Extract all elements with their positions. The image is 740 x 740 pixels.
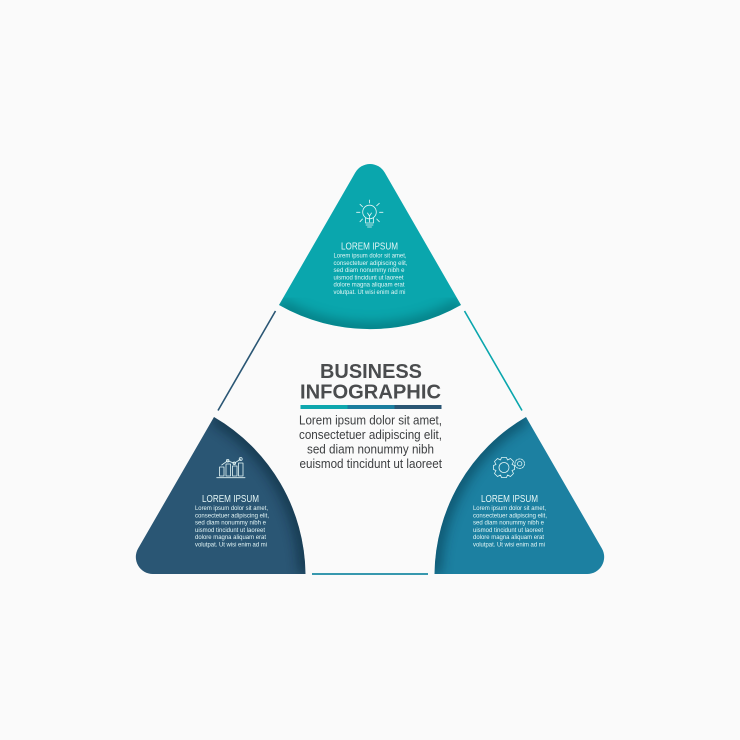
title underline bar: [300, 405, 442, 409]
text block: top panel: uismod tincidunt ut laoreet: [334, 274, 404, 281]
text block: right panel: dolore magna aliquam erat: [473, 534, 544, 541]
connector: left line: [218, 311, 276, 410]
title: INFOGRAPHIC: [300, 380, 441, 404]
text block: left panel: consectetuer adipiscing elit,: [195, 512, 269, 519]
connector: right line: [464, 311, 522, 410]
panel: right triangle: [434, 417, 604, 574]
text block: center description: sed diam nonummy nibh: [307, 442, 434, 456]
text block: right panel: consectetuer adipiscing elit,: [473, 512, 547, 519]
text block: top panel: Lorem ipsum dolor sit amet,: [334, 252, 407, 260]
text block: top panel: volutpat. Ut wisi enim ad mi: [334, 289, 406, 296]
text block: right panel: uismod tincidunt ut laoreet: [473, 527, 543, 534]
panel: top triangle: [279, 164, 461, 329]
text block: center description: euismod tincidunt ut laoreet: [300, 456, 442, 471]
text block: left panel: dolore magna aliquam erat: [195, 534, 266, 541]
text block: right panel: sed diam nonummy nibh e: [473, 520, 544, 526]
text block: top panel: sed diam nonummy nibh e: [334, 267, 405, 274]
text block: top panel: consectetuer adipiscing elit,: [334, 260, 408, 267]
connector: bottom line: [312, 573, 428, 575]
text block: left panel: volutpat. Ut wisi enim ad mi: [195, 541, 267, 548]
icon: gears: [494, 458, 524, 478]
text block: right panel: Lorem ipsum dolor sit amet,: [473, 505, 546, 512]
text block: right panel: volutpat. Ut wisi enim ad mi: [473, 541, 545, 548]
title: [300, 360, 441, 404]
text block: left panel: sed diam nonummy nibh e: [195, 520, 266, 526]
icon: bar chart: [217, 458, 245, 478]
heading: right panel: LOREM IPSUM: [481, 494, 538, 505]
text block: left panel: uismod tincidunt ut laoreet: [195, 527, 265, 534]
heading: left panel: LOREM IPSUM: [202, 494, 259, 505]
panel: left triangle: [136, 417, 306, 574]
text block: left panel: Lorem ipsum dolor sit amet,: [195, 505, 268, 512]
heading: top panel: LOREM IPSUM: [341, 242, 398, 252]
text block: center description: Lorem ipsum dolor sit amet,: [299, 412, 442, 428]
text block: center description: consectetuer adipiscing elit,: [299, 427, 442, 442]
text block: top panel: dolore magna aliquam erat: [334, 282, 405, 289]
icon: light bulb: [356, 200, 383, 227]
title: BUSINESS: [320, 360, 422, 383]
